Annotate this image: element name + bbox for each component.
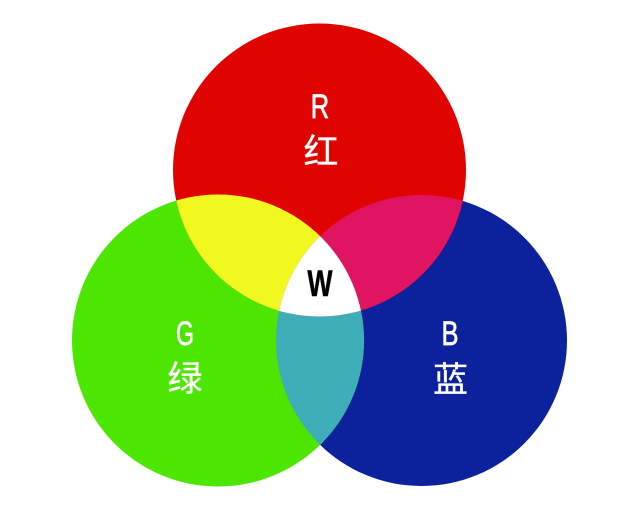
RGB colour mixing Venn diagram bbox=[72, 24, 567, 486]
overlap: cyan (green and blue) bbox=[276, 310, 364, 445]
label: B 蓝 bbox=[433, 316, 468, 400]
label: R 红: 红 bbox=[303, 133, 339, 172]
red circle bbox=[173, 24, 466, 316]
label: B 蓝: 蓝 bbox=[433, 361, 468, 400]
label: B 蓝: B bbox=[441, 316, 459, 353]
blue circle bbox=[276, 195, 567, 486]
label: R 红 bbox=[303, 89, 339, 172]
overlap: white centre bbox=[279, 236, 361, 316]
label: G 绿 bbox=[167, 316, 203, 399]
label: G 绿: 绿 bbox=[167, 360, 203, 399]
overlap: magenta (red and blue) bbox=[279, 195, 463, 316]
label: W: W bbox=[307, 263, 333, 304]
label: G 绿: G bbox=[176, 316, 194, 353]
label: R 红: R bbox=[311, 89, 329, 126]
overlap: yellow (red and green) bbox=[176, 194, 361, 316]
green circle bbox=[72, 194, 364, 486]
